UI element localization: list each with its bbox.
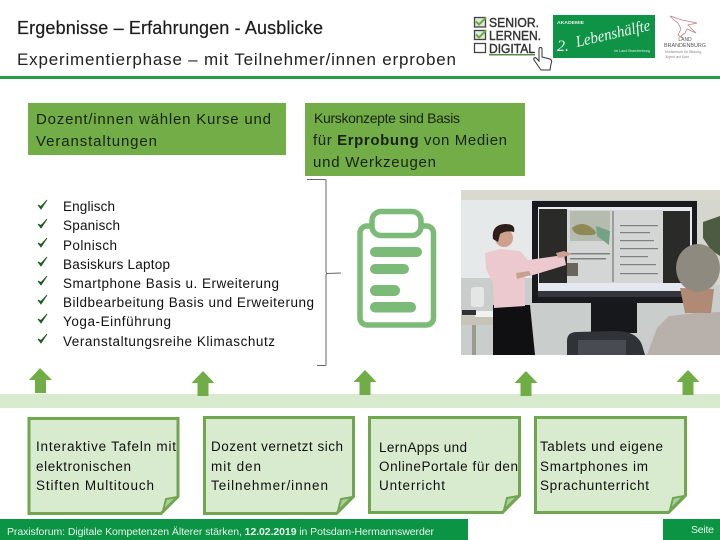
page label: Seite [691, 524, 714, 536]
course checklist [38, 199, 314, 349]
panel: Dozent/innen: Veranstaltungen [36, 133, 157, 150]
photo: presenter at interactive board [461, 190, 720, 355]
course checklist: Smartphone Basis u. Erweiterung [63, 276, 279, 291]
subtitle: Experimentierphase – mit Teilnehmer/innen erproben [17, 50, 456, 69]
logo: Land Brandenburg: BRANDENBURG [664, 43, 706, 49]
check marks [38, 200, 47, 343]
note card 1: Stiften Multitouch [36, 478, 154, 493]
panel: Kurskonzepte: Kurskonzepte sind Basis [314, 110, 460, 126]
footer bar [0, 519, 468, 540]
course checklist: Veranstaltungsreihe Klimaschutz [63, 334, 275, 349]
note card 3: Unterricht [379, 478, 445, 493]
note card 1 [29, 418, 178, 514]
panel: Kurskonzepte [305, 103, 525, 176]
course checklist: Englisch [63, 199, 115, 214]
arrow 4 [514, 371, 538, 396]
icon: clipboard [360, 212, 434, 325]
note card 1: elektronischen [36, 459, 131, 474]
arrow 3 [354, 370, 376, 395]
panel: Kurskonzepte: und Werkzeugen [313, 154, 436, 171]
note card 1: Interaktive Tafeln mit [36, 439, 176, 454]
course checklist: Spanisch [63, 218, 120, 233]
panel: Dozent/innen [28, 103, 286, 155]
logo: Senior Lernen Digital: SENIOR. [489, 15, 539, 30]
note card 4: Tablets und eigene [540, 439, 663, 454]
note card 4 [536, 418, 686, 512]
arrow 5 [676, 370, 700, 395]
logo: Land Brandenburg: LAND [678, 37, 692, 43]
note card 2: Dozent vernetzt sich [211, 439, 343, 454]
note card 3: LernApps und [379, 440, 467, 455]
chair [567, 331, 645, 355]
panel: Kurskonzepte: für Erprobung von Medien [313, 132, 507, 149]
seated viewer [647, 312, 720, 355]
course checklist: Bildbearbeitung Basis und Erweiterung [63, 295, 314, 310]
logo: Senior Lernen Digital: LERNEN. [489, 28, 541, 43]
logo: Akademie 2. Lebenshälfte [553, 15, 655, 58]
note card 2 [204, 418, 354, 514]
course checklist: Basiskurs Laptop [63, 257, 170, 272]
logo: Land Brandenburg: Jugend und Sport [665, 55, 689, 59]
bracket [307, 180, 341, 366]
logo: Land Brandenburg [664, 16, 706, 59]
note card 4: Smartphones im [540, 459, 648, 474]
logo: Land Brandenburg: Ministerium für Bildung, [665, 50, 702, 54]
band [0, 394, 720, 408]
page label [663, 519, 720, 540]
note card 2: Teilnehmer/innen [211, 478, 328, 493]
presenter [493, 305, 535, 355]
note card 3: OnlinePortale für den [379, 459, 518, 474]
logo: Akademie 2. Lebenshälfte: im Land Brandenburg [614, 48, 650, 53]
header rule [0, 76, 720, 79]
logo: Akademie 2. Lebenshälfte: Lebenshälfte [573, 17, 652, 51]
logo: Akademie 2. Lebenshälfte: AKADEMIE [557, 20, 584, 25]
plant [703, 216, 720, 256]
logo: Akademie 2. Lebenshälfte: 2. [557, 38, 569, 55]
note card 3 [370, 418, 520, 512]
arrow 2 [192, 371, 214, 396]
title: Ergebnisse – Erfahrungen - Ausblicke [17, 18, 323, 38]
table and projector [461, 316, 515, 325]
arrow 1 [29, 368, 52, 393]
course checklist: Polnisch [63, 238, 117, 253]
panel: Dozent/innen: Dozent/innen wählen Kurse und [36, 111, 271, 128]
logo: Senior Lernen Digital [474, 15, 552, 70]
note card 4: Sprachunterricht [540, 478, 649, 493]
screen [532, 201, 697, 303]
stand [591, 303, 637, 333]
note card 2: mit den [211, 459, 261, 474]
footer bar: Praxisforum: Digitale Kompetenzen Älterer stärken, 12.02.2019 in Potsdam-Hermannswerder [7, 526, 434, 538]
logo: Senior Lernen Digital: DIGITAL [489, 41, 535, 56]
course checklist: Yoga-Einführung [63, 314, 171, 329]
